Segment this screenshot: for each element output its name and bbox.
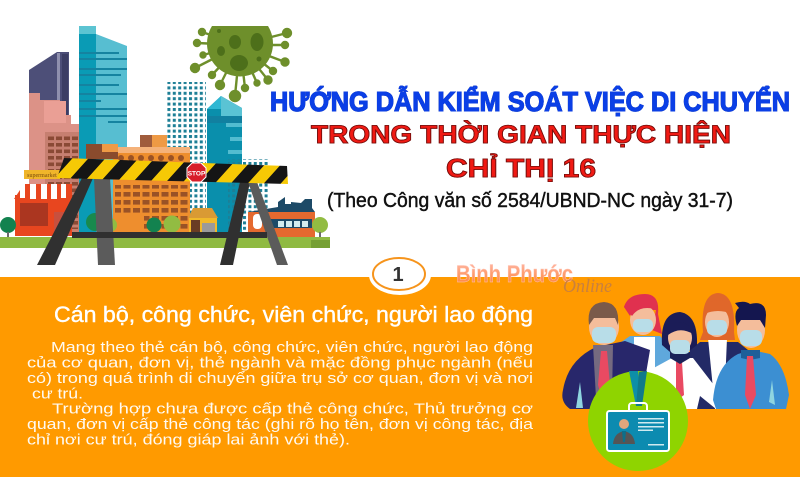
title block: [270, 86, 790, 212]
text block: guidance: cư trú.: [32, 385, 83, 402]
watermark: Bình Phước Online: Bình Phước: [456, 261, 573, 288]
building: dark purple tower: [29, 52, 69, 130]
building: short blue tower: [207, 96, 242, 232]
text block: guidance: quan, đơn vị cấp thẻ công tác (ghi rõ họ tên, đơn vị công tác, địa: [27, 416, 534, 433]
heading: Cán bộ, công chức, viên chức, người lao động: [54, 302, 533, 327]
virus: [191, 26, 291, 101]
text block: guidance: [27, 339, 534, 448]
trees: [0, 213, 328, 238]
text block: guidance: Mang theo thẻ cán bộ, công chức, viên chức, người lao động: [51, 339, 533, 356]
worker: man in blue shirt: [713, 302, 789, 409]
subtitle: (Theo Công văn số 2584/UBND-NC ngày 31-7): [327, 189, 733, 212]
watermark: Bình Phước Online: [456, 261, 612, 297]
panel: orange section: [0, 277, 800, 477]
watermark: Bình Phước Online: Online: [563, 276, 612, 297]
text block: guidance: có) trong quá trình di chuyển giữa trụ sở cơ quan, đơn vị và nơi: [27, 370, 533, 387]
supermarket shop: [14, 170, 72, 236]
factory: [248, 197, 315, 237]
title line 2: TRONG THỜI GIAN THỰC HIỆN: [311, 119, 731, 149]
text block: guidance: chỉ nơi cư trú, đóng giáp lai ảnh với thẻ).: [27, 431, 350, 448]
building: dotted right tower: [228, 159, 268, 233]
text block: guidance: của cơ quan, đơn vị, thẻ ngành và mặc đồng phục ngành (nếu: [27, 354, 533, 372]
text block: guidance: Trường hợp chưa được cấp thẻ công chức, Thủ trưởng cơ: [52, 401, 533, 418]
supermarket shop: supermarket: [27, 173, 57, 179]
road barrier: [37, 158, 288, 265]
stop sign: STOP: [188, 170, 206, 178]
building: pink tower: [29, 93, 79, 232]
worker: woman with red hair: [614, 294, 672, 410]
building: orange hotel: [86, 135, 190, 233]
illustration: city behind a road barrier: [0, 26, 330, 265]
stop sign: [187, 163, 206, 182]
building: tall blue tower: [79, 26, 127, 232]
ground: [0, 237, 330, 248]
small house: [188, 208, 218, 233]
worker: woman with orange hair: [690, 293, 748, 409]
icon: id card badge: [588, 371, 688, 471]
building: dotted white tower: [167, 82, 206, 232]
title line 3: CHỈ THỊ 16: [446, 153, 596, 183]
illustration: masked workers: [562, 293, 789, 471]
number badge: 1: [392, 264, 404, 286]
worker: woman in white shirt: [650, 312, 722, 409]
worker: man in navy suit: [562, 302, 650, 409]
number badge: [369, 255, 431, 295]
